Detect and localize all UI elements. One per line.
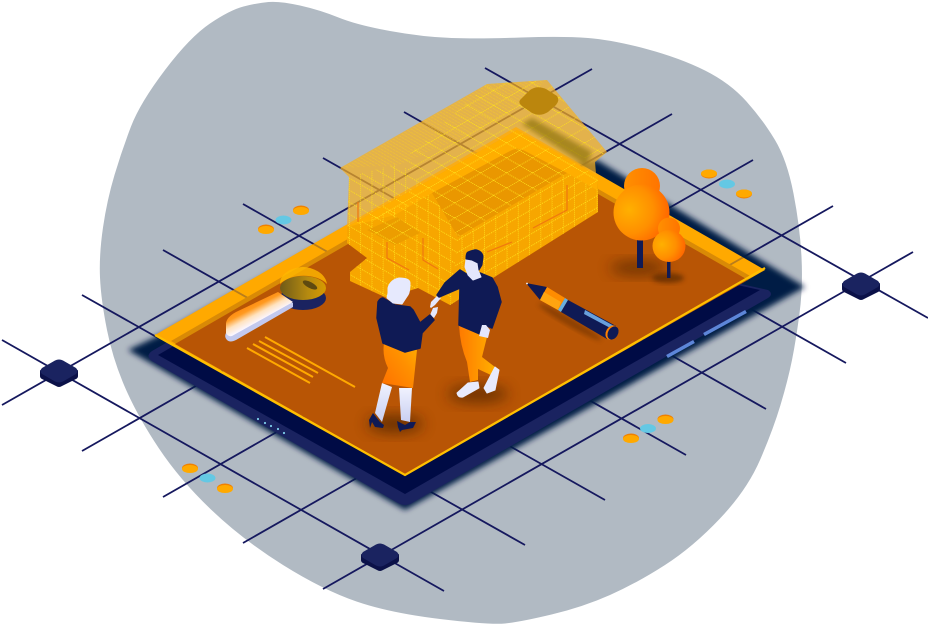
ghost roof fine dots xyxy=(340,80,547,168)
torso xyxy=(377,298,434,352)
face xyxy=(465,259,481,280)
tablet buttons xyxy=(667,312,746,356)
board xyxy=(154,127,766,476)
floating dots: upper right xyxy=(701,170,752,198)
key blade side xyxy=(225,301,293,342)
amber frame xyxy=(155,127,765,476)
torso xyxy=(437,270,501,334)
hand xyxy=(430,307,438,318)
upper band xyxy=(347,130,598,227)
floating dots: lower left xyxy=(182,464,233,493)
node: bottom xyxy=(361,544,399,571)
key slot xyxy=(302,279,318,291)
lines through frame xyxy=(221,151,744,418)
tree: small xyxy=(652,218,686,278)
legs xyxy=(375,383,392,422)
house wireframe xyxy=(340,80,607,305)
key head top xyxy=(280,276,326,300)
person: man xyxy=(430,250,501,397)
tablet xyxy=(148,208,771,505)
key xyxy=(225,267,327,342)
roof plane xyxy=(432,149,567,237)
house base xyxy=(347,130,598,305)
windows xyxy=(358,185,567,270)
text lines on board xyxy=(247,337,355,387)
tablet dots xyxy=(257,418,285,434)
upper band grid xyxy=(347,130,598,227)
pen xyxy=(526,283,621,342)
floating dots: upper left xyxy=(258,206,309,234)
node: right xyxy=(842,272,880,300)
hand left xyxy=(430,296,441,308)
porch xyxy=(367,217,420,245)
shoes xyxy=(369,413,384,428)
ground shadows xyxy=(367,261,684,433)
key glow xyxy=(280,267,327,284)
tablet bezel xyxy=(148,208,771,505)
key head side xyxy=(280,286,326,310)
tree: large xyxy=(614,168,670,268)
person: woman xyxy=(369,278,438,432)
ghost roof grid xyxy=(400,80,607,190)
tablet screen xyxy=(158,212,760,494)
ghost wall grid xyxy=(347,163,430,240)
front wall grid xyxy=(347,193,458,305)
node: left xyxy=(40,360,78,387)
key blade top xyxy=(226,292,293,336)
ghost house body xyxy=(340,80,607,227)
board surface xyxy=(175,147,748,474)
shoes xyxy=(457,382,479,397)
trousers xyxy=(459,325,495,382)
hand right xyxy=(479,325,490,338)
chimney shadow xyxy=(522,118,592,166)
hair xyxy=(387,278,410,304)
right wall grid xyxy=(450,173,598,305)
tablet drop shadow xyxy=(128,160,805,510)
skirt xyxy=(382,343,417,388)
chimney xyxy=(519,87,558,115)
frame inner edge xyxy=(171,142,752,474)
hair xyxy=(466,250,483,270)
background blob xyxy=(100,2,802,624)
floating dots: lower right xyxy=(623,414,674,443)
front edge highlight xyxy=(155,268,765,475)
